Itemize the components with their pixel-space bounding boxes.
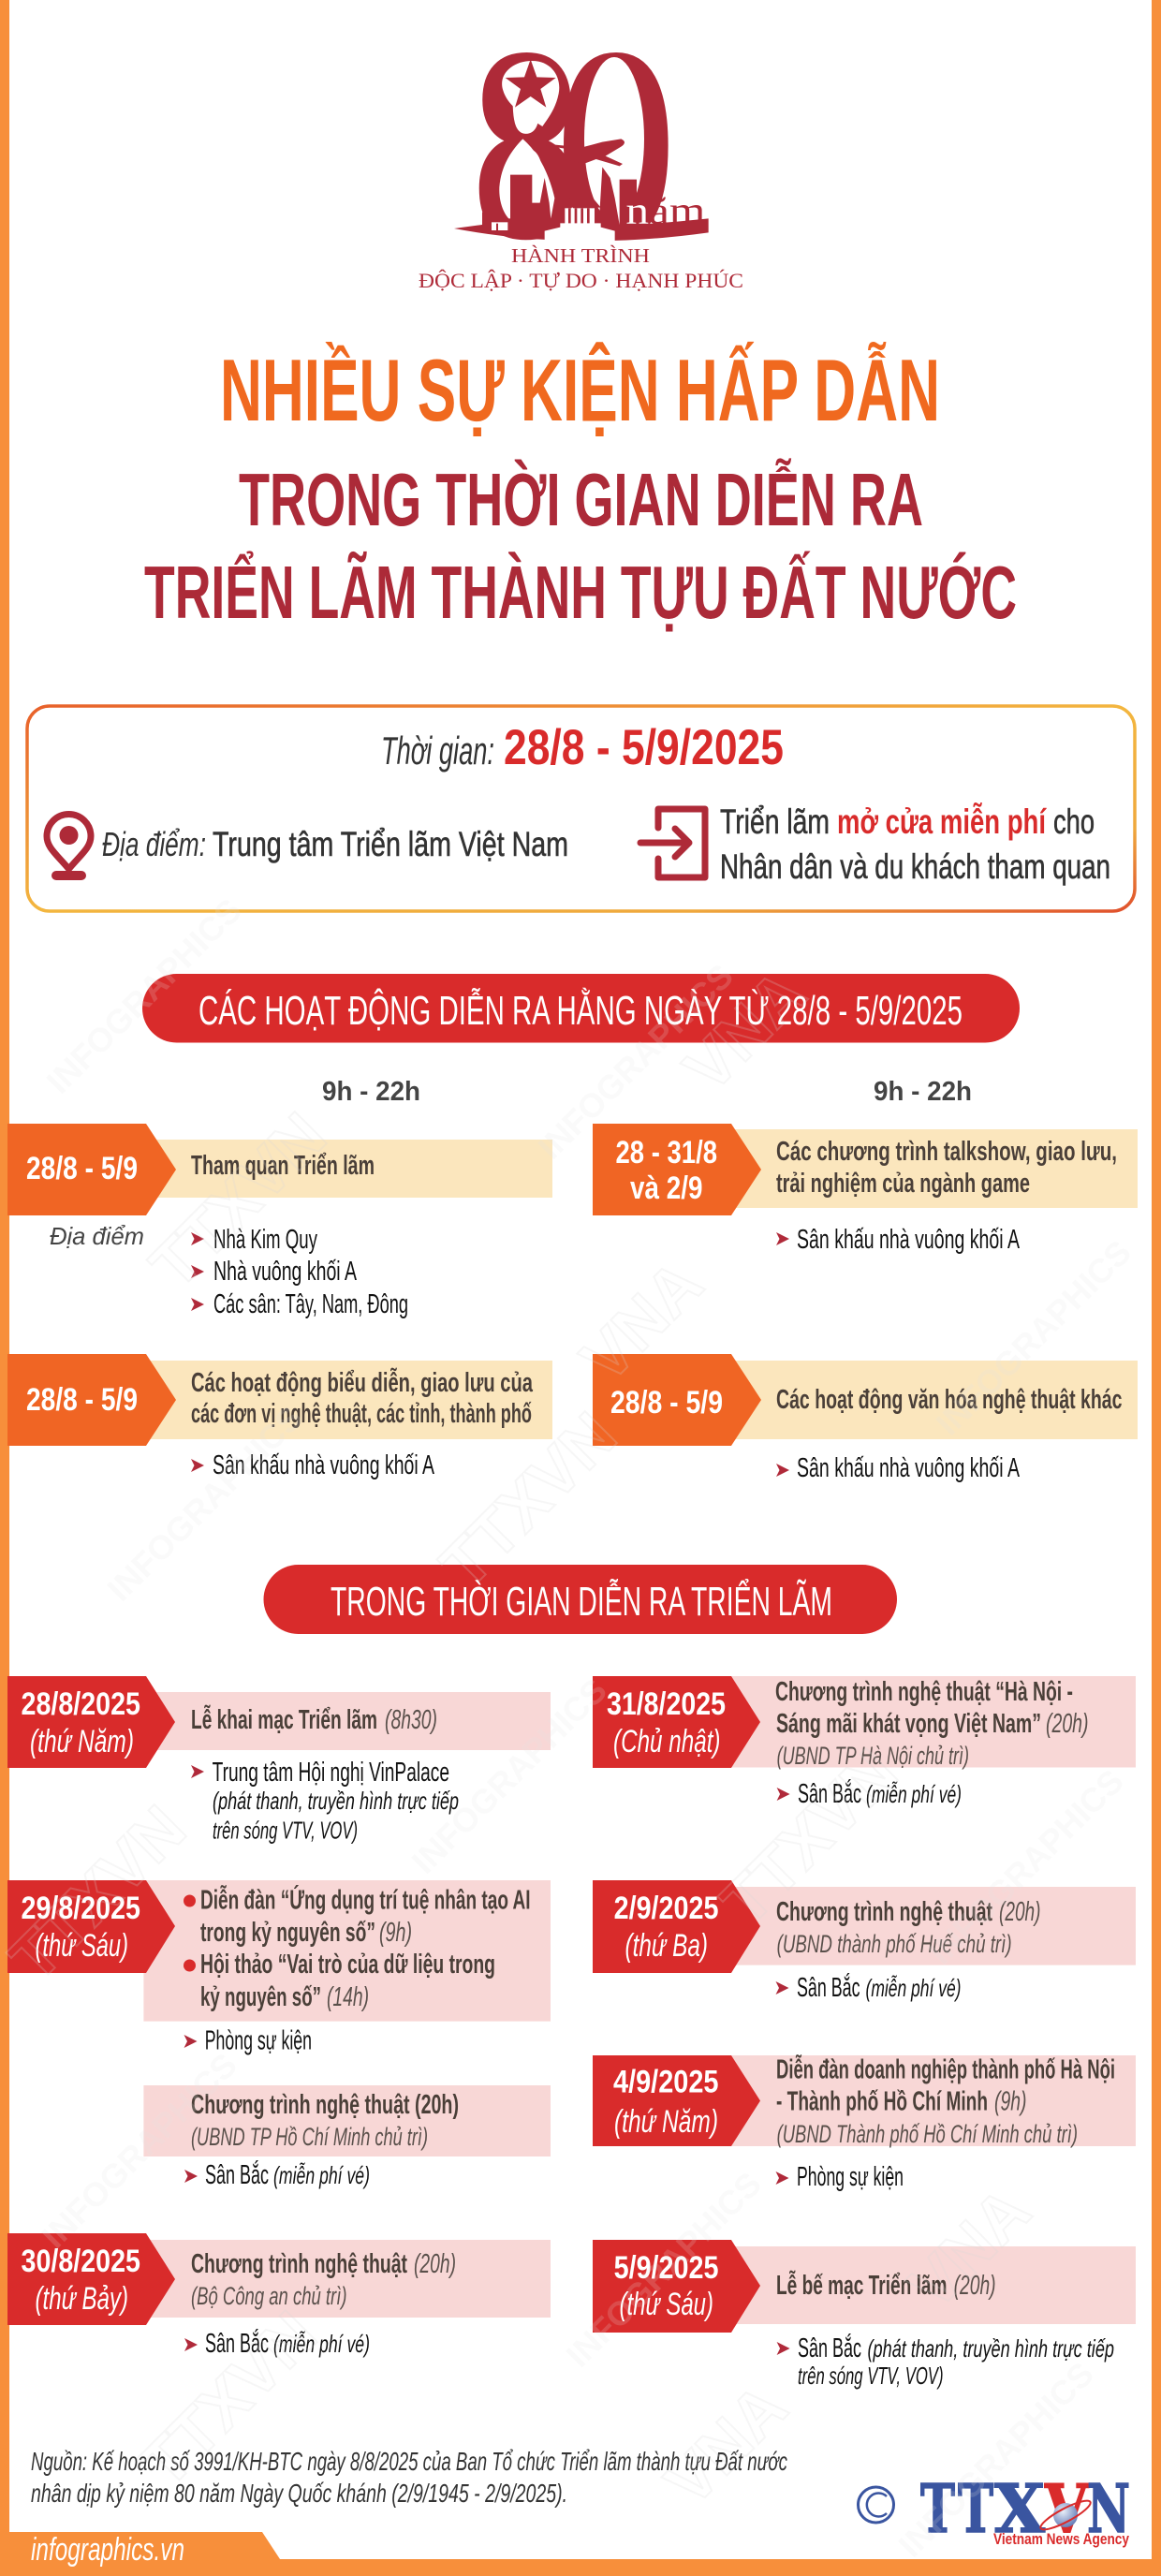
event 30/8/2025: Chương trình nghệ thuật	[191, 2249, 407, 2279]
logo slogan: ĐỘC LẬP · TỰ DO · HẠNH PHÚC	[419, 269, 743, 292]
heading pill: during the exhibition: TRONG THỜI GIAN DIỄN RA TRIỂN LÃM	[331, 1577, 832, 1625]
location: Sân Bắc	[205, 2328, 269, 2359]
event 28/8/2025	[7, 1676, 551, 1768]
location	[184, 2026, 312, 2056]
card: biểu diễn: 28/8 - 5/9	[26, 1382, 138, 1418]
icon: copyright	[858, 2487, 893, 2523]
card: talkshow: 28 - 31/8	[616, 1135, 717, 1170]
watermark: TTXVN	[136, 1098, 340, 1303]
location: trên sóng VTV, VOV)	[798, 2362, 944, 2390]
source note: Nguồn: Kế hoạch số 3991/KH-BTC ngày 8/8/2025 của Ban Tổ chức Triển lãm thành tựu Đất nước	[31, 2447, 787, 2476]
location	[184, 2159, 370, 2190]
event 31/8/2025: 31/8/2025	[607, 1686, 726, 1722]
watermark: INFOGRAPHICS	[35, 2045, 244, 2256]
card: biểu diễn: các đơn vị nghệ thuật, các tỉnh, thành phố	[191, 1399, 532, 1429]
logo skyline	[454, 153, 709, 243]
event 29/8/2025: 29/8/2025	[21, 1891, 140, 1926]
event 2/9/2025: (UBND thành phố Huế chủ trì)	[777, 1930, 1012, 1958]
watermark: TTXVN	[126, 2297, 331, 2501]
location	[775, 2162, 904, 2192]
logo: TTXVN: N	[1087, 2469, 1130, 2548]
card: văn hóa	[593, 1354, 1138, 1446]
event 29/8/2025	[7, 1880, 551, 2022]
free entry text	[720, 802, 1110, 886]
location text: Trung tâm Triển lãm Việt Nam	[213, 825, 568, 863]
event 4/9/2025: 4/9/2025	[613, 2065, 719, 2100]
event 4/9/2025	[593, 2053, 1136, 2148]
logo slogan: HÀNH TRÌNH	[511, 244, 650, 267]
event 30/8/2025	[7, 2233, 551, 2325]
location: Trung tâm Hội nghị VinPalace	[213, 1758, 449, 1788]
location list	[191, 1225, 408, 1319]
location: Phòng sự kiện	[797, 2162, 904, 2192]
location label: Địa điểm	[50, 1222, 144, 1250]
event 28/8/2025: Lễ khai mạc Triển lãm	[191, 1703, 377, 1735]
location: (phát thanh, truyền hình trực tiếp	[213, 1787, 459, 1815]
watermark: INFOGRAPHICS	[404, 1671, 614, 1881]
event 31/8/2025: Sáng mãi khát vọng Việt Nam”	[776, 1709, 1041, 1739]
watermark: VNA	[566, 1246, 716, 1396]
website label: infographics.vn	[31, 2532, 184, 2568]
logo: TTXVN: T	[920, 2469, 955, 2548]
time	[381, 720, 784, 775]
event 30/8/2025: (Bộ Công an chủ trì)	[191, 2282, 346, 2310]
card: tham quan	[7, 1124, 552, 1215]
card: tham quan: Tham quan Triển lãm	[191, 1151, 375, 1181]
event 28/8/2025: (8h30)	[385, 1705, 437, 1735]
location	[776, 1453, 1020, 1483]
logo: 80 năm	[454, 0, 709, 298]
event 29/8/2025: Hội thảo “Vai trò của dữ liệu trong	[200, 1950, 495, 1980]
watermark: INFOGRAPHICS	[531, 956, 741, 1167]
logo plane	[543, 139, 625, 166]
location	[191, 1450, 434, 1480]
logo: TTXVN: T	[958, 2469, 993, 2548]
location text: Địa điểm:	[102, 825, 206, 863]
logo: TTXVN: X	[994, 2469, 1046, 2548]
event 2/9/2025: (20h)	[999, 1897, 1041, 1927]
location	[191, 1758, 459, 1845]
watermark: VNA	[669, 956, 819, 1106]
event 29/8/2025: Diễn đàn “Ứng dụng trí tuệ nhân tạo AI	[200, 1884, 531, 1916]
watermark: INFOGRAPHICS	[39, 891, 249, 1101]
location: Phòng sự kiện	[205, 2026, 312, 2056]
event 28/8/2025: 28/8/2025	[21, 1686, 140, 1722]
heading pill: during the exhibition	[264, 1565, 897, 1634]
location: Sân Bắc	[798, 2333, 861, 2363]
event 28/8/2025: (thứ Năm)	[30, 1724, 134, 1759]
event 31/8/2025: (20h)	[1046, 1709, 1088, 1739]
logo: TTXVN: V	[1044, 2469, 1090, 2548]
watermark	[0, 891, 1139, 2565]
watermark: INFOGRAPHICS	[100, 1398, 310, 1609]
event 29/8 evening: (UBND TP Hồ Chí Minh chủ trì)	[191, 2123, 428, 2151]
location list: Nhà Kim Quy	[213, 1225, 317, 1255]
location text	[102, 825, 568, 863]
location	[184, 2328, 370, 2359]
event 30/8/2025: 30/8/2025	[21, 2244, 140, 2279]
watermark: TTXVN	[707, 1735, 911, 1939]
location: (miễn phí vé)	[273, 2330, 370, 2358]
watermark: INFOGRAPHICS	[921, 1761, 1131, 1972]
event 30/8/2025: (20h)	[414, 2249, 456, 2279]
event 2/9/2025: (thứ Ba)	[625, 1928, 708, 1964]
panel: time and place	[27, 706, 1135, 911]
location: Sân Bắc	[205, 2159, 269, 2190]
watermark: INFOGRAPHICS	[891, 2354, 1101, 2565]
card: talkshow: và 2/9	[630, 1170, 702, 1206]
event 2/9/2025: Chương trình nghệ thuật	[776, 1897, 992, 1927]
event 31/8/2025	[593, 1676, 1136, 1770]
source note: nhân dịp kỷ niệm 80 năm Ngày Quốc khánh (2/9/1945 - 2/9/2025).	[31, 2479, 567, 2508]
location	[775, 1972, 961, 2003]
logo: TTXVN: Vietnam News Agency	[993, 2530, 1129, 2548]
location: Sân khấu nhà vuông khối A	[213, 1450, 434, 1480]
time: Thời gian:	[381, 729, 494, 773]
opening hours right: 9h - 22h	[874, 1077, 972, 1107]
event 29/8/2025: kỷ nguyên số”	[200, 1982, 321, 2012]
location: Sân Bắc	[797, 1972, 860, 2003]
event 4/9/2025: (9h)	[994, 2087, 1026, 2117]
location: Sân khấu nhà vuông khối A	[797, 1225, 1020, 1255]
event 30/8/2025: (thứ Bảy)	[36, 2281, 128, 2317]
event 5/9/2025: (thứ Sáu)	[620, 2287, 713, 2322]
watermark: TTXVN	[426, 1398, 630, 1602]
watermark: VNA	[894, 2173, 1044, 2323]
location list: Nhà vuông khối A	[213, 1257, 357, 1287]
event 29/8/2025: (thứ Sáu)	[36, 1928, 128, 1964]
event 4/9/2025: - Thành phố Hồ Chí Minh	[776, 2087, 988, 2117]
event 29/8/2025: (14h)	[327, 1982, 369, 2012]
title	[144, 340, 1017, 634]
logo numeral 80	[472, 0, 678, 298]
location: (miễn phí vé)	[865, 1974, 961, 2002]
logo slogan	[419, 244, 743, 292]
event 29/8 evening: Chương trình nghệ thuật (20h)	[191, 2090, 459, 2120]
card: talkshow	[593, 1124, 1138, 1215]
event 5/9/2025: Lễ bế mạc Triển lãm	[776, 2269, 948, 2301]
icon: location pin	[47, 815, 91, 880]
location list: Các sân: Tây, Nam, Đông	[213, 1289, 408, 1319]
logo word năm: năm	[625, 189, 705, 232]
logo: TTXVN	[920, 2469, 1130, 2548]
location: Sân khấu nhà vuông khối A	[797, 1453, 1020, 1483]
location	[776, 1225, 1020, 1255]
card: văn hóa: 28/8 - 5/9	[610, 1385, 723, 1420]
location: (miễn phí vé)	[866, 1780, 962, 1808]
heading pill: daily activities	[142, 974, 1020, 1043]
event 2/9/2025: 2/9/2025	[614, 1891, 719, 1926]
location	[777, 2333, 1114, 2390]
card: talkshow: trải nghiệm của ngành game	[776, 1169, 1030, 1199]
logo numeral 80: 0	[554, 0, 678, 298]
card: tham quan: 28/8 - 5/9	[26, 1151, 138, 1186]
watermark: TTXVN	[0, 1791, 199, 1995]
event 29/8/2025: (9h)	[379, 1918, 412, 1948]
icon: entry door arrow	[640, 809, 705, 877]
logo numeral 80: 8	[472, 0, 581, 298]
event 31/8/2025: (UBND TP Hà Nội chủ trì)	[777, 1742, 969, 1770]
event 29/8 evening	[143, 2085, 551, 2156]
location: Sân Bắc	[798, 1778, 861, 1809]
event 2/9/2025	[593, 1880, 1136, 1973]
watermark: INFOGRAPHICS	[929, 1232, 1139, 1443]
source note	[31, 2447, 787, 2508]
event 4/9/2025: (thứ Năm)	[614, 2104, 718, 2140]
event 5/9/2025: 5/9/2025	[614, 2250, 719, 2286]
event 31/8/2025: (Chủ nhật)	[613, 1724, 721, 1759]
location: (miễn phí vé)	[273, 2161, 370, 2189]
watermark: INFOGRAPHICS	[559, 2164, 769, 2375]
card: biểu diễn	[7, 1354, 552, 1446]
location	[777, 1778, 962, 1809]
logo star	[502, 59, 559, 126]
event 5/9/2025	[593, 2240, 1136, 2333]
free entry text: mở cửa miễn phí	[837, 802, 1047, 841]
opening hours left: 9h - 22h	[322, 1077, 420, 1107]
card: biểu diễn: Các hoạt động biểu diễn, giao lưu của	[191, 1366, 534, 1398]
event 5/9/2025: (20h)	[954, 2271, 996, 2301]
free entry text: cho	[1053, 802, 1095, 841]
free entry text: Triển lãm	[720, 802, 830, 841]
time: 28/8 - 5/9/2025	[504, 720, 784, 775]
event 29/8/2025: trong kỷ nguyên số”	[200, 1918, 375, 1948]
watermark: VNA	[651, 2370, 801, 2520]
location: trên sóng VTV, VOV)	[213, 1817, 358, 1845]
